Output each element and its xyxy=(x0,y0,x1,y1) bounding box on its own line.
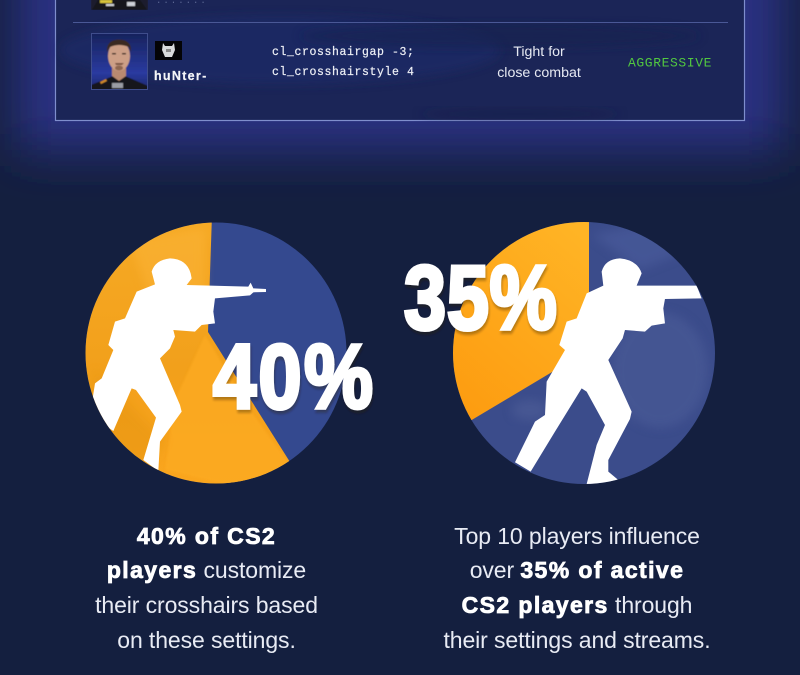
player portrait: previous row xyxy=(91,0,148,10)
description text xyxy=(497,44,581,81)
pie chart: 40 percent xyxy=(86,222,374,484)
crosshair command text: cl_crosshairstyle 4 xyxy=(272,66,415,79)
caption: 35 percent: over 35% of active xyxy=(470,557,684,583)
soldier silhouette xyxy=(90,258,266,471)
description text: close combat xyxy=(497,65,581,81)
caption: 35 percent: their settings and streams. xyxy=(443,627,711,653)
player name: huNter-: huNter- xyxy=(154,69,208,83)
caption: 40 percent: 40% of CS2 xyxy=(137,523,276,549)
orange slice xyxy=(445,215,589,421)
caption: 40 percent: on these settings. xyxy=(117,627,296,653)
crosshair command text xyxy=(272,46,415,79)
big number: 35%: 35% xyxy=(404,246,558,349)
caption: 40 percent xyxy=(95,523,318,653)
caption: 35 percent: CS2 players through xyxy=(462,592,692,618)
style tag: aggressive: AGGRESSIVE xyxy=(628,56,712,70)
caption: 40 percent: players customize xyxy=(107,557,306,583)
description text: Tight for xyxy=(513,44,565,60)
caption: 35 percent: Top 10 players influence xyxy=(454,523,700,549)
glow behind settings panel xyxy=(16,0,784,150)
orange slice xyxy=(86,222,290,484)
pie chart: 35 percent xyxy=(404,215,720,490)
team logo: G2 xyxy=(155,41,182,60)
crosshair command text: cl_crosshairgap -3; xyxy=(272,46,415,59)
panel: crosshair settings table xyxy=(56,0,744,120)
big number: 40%: 40% xyxy=(213,326,375,427)
caption: 35 percent xyxy=(443,523,711,653)
player portrait: huNter- xyxy=(92,39,147,89)
caption: 40 percent: their crosshairs based xyxy=(95,592,318,618)
soldier silhouette xyxy=(515,258,702,487)
